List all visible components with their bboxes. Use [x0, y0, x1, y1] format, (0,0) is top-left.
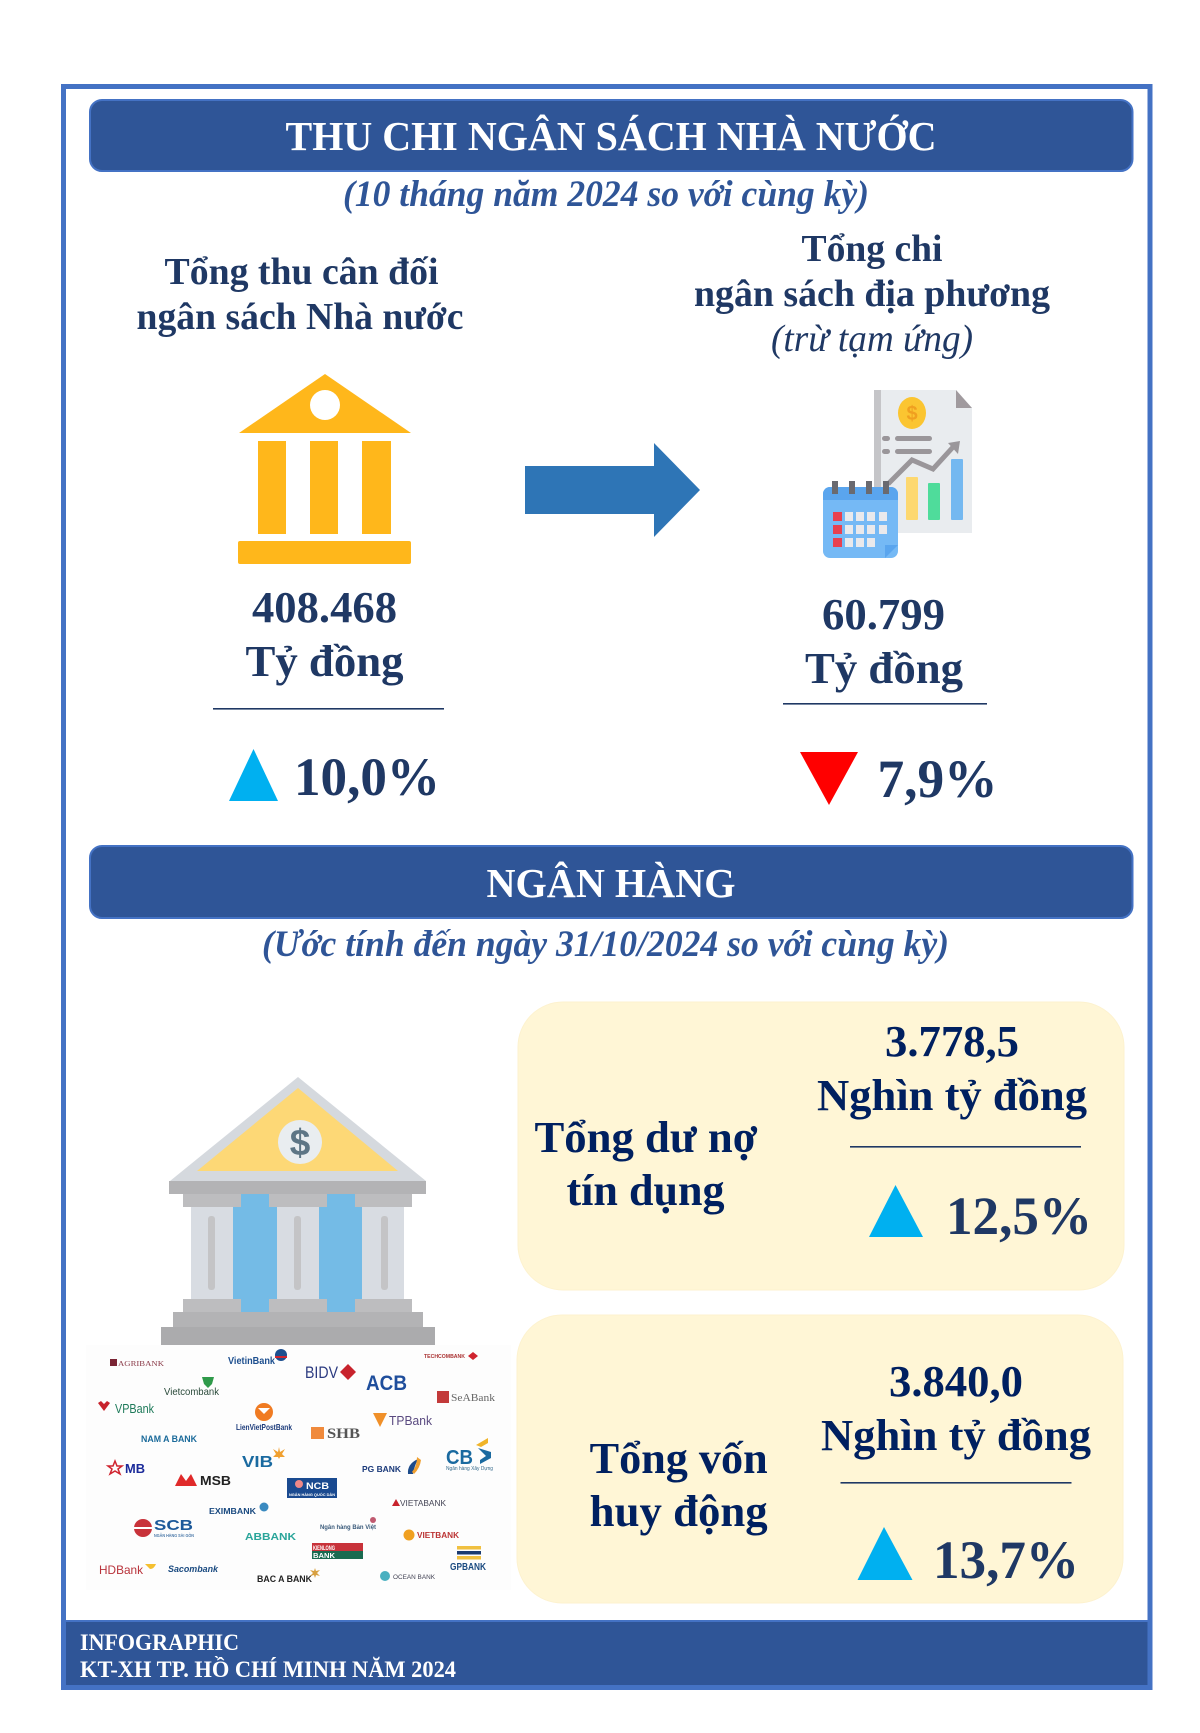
panel: deposits [517, 1315, 1123, 1603]
bank logos collage: Ngân hàng Xây Dựng [446, 1466, 493, 1472]
icon: blue bank building: $ [290, 1122, 311, 1163]
bank logos collage: Vietcombank [164, 1386, 220, 1398]
credit label: Tổng dư nợ [534, 1113, 758, 1162]
bank logos collage: OCEAN BANK [393, 1574, 436, 1581]
revenue heading: Tổng thu cân đối [164, 251, 438, 293]
footer bar [61, 1620, 1152, 1690]
bank logos collage: SeABank [451, 1393, 495, 1404]
bank logos collage: SCB [154, 1517, 193, 1534]
bank logos collage: KIENLONG [313, 1545, 335, 1552]
expenditure heading [694, 228, 1050, 360]
expenditure value: 60.799 [822, 590, 945, 639]
heading banner: banking: NGÂN HÀNG [486, 860, 736, 906]
heading banner: banking [90, 846, 1132, 918]
subtitle: banking date: (Ước tính đến ngày 31/10/2024 so với cùng kỳ) [262, 924, 949, 965]
credit label: tín dụng [566, 1166, 724, 1215]
deposits change [858, 1527, 1079, 1590]
deposits label [590, 1434, 768, 1536]
bank logos collage: NCB [306, 1481, 330, 1491]
deposits value [821, 1357, 1091, 1484]
bank logos collage: VietinBank [228, 1355, 275, 1367]
revenue value [213, 583, 444, 710]
credit value: Nghìn tỷ đồng [817, 1071, 1087, 1120]
deposits label: huy động [590, 1487, 768, 1536]
revenue heading [136, 251, 464, 338]
expenditure change [800, 749, 998, 809]
panel: credit [518, 1002, 1124, 1290]
bank logos collage: NAM A BANK [141, 1434, 197, 1444]
revenue value: Tỷ đồng [246, 637, 404, 686]
credit value [817, 1017, 1087, 1148]
bank logos collage: VIETABANK [400, 1499, 447, 1508]
bank logos collage: ABBANK [245, 1532, 297, 1543]
revenue change [229, 747, 440, 807]
bank logos collage: Ngân hàng Bản Việt [320, 1525, 376, 1531]
bank logos collage: NGÂN HÀNG SÀI GÒN [154, 1531, 194, 1538]
arrow: revenue to expenditure [525, 443, 700, 537]
bank logos collage: VPBank [115, 1402, 155, 1416]
expenditure change: 7,9% [878, 749, 998, 809]
subtitle: budget period: (10 tháng năm 2024 so với cùng kỳ) [343, 174, 869, 215]
bank logos collage: GPBANK [450, 1562, 487, 1573]
bank logos collage: AGRIBANK [118, 1359, 165, 1368]
bank logos collage: NGÂN HÀNG QUỐC DÂN [289, 1492, 335, 1497]
credit label [534, 1113, 758, 1215]
deposits label: Tổng vốn [590, 1434, 768, 1483]
heading banner: budget: THU CHI NGÂN SÁCH NHÀ NƯỚC [286, 113, 936, 159]
expenditure heading: (trừ tạm ứng) [771, 318, 973, 360]
deposits value: 3.840,0 [889, 1357, 1023, 1406]
footer bar: INFOGRAPHIC [80, 1630, 239, 1655]
credit change: 12,5% [946, 1186, 1092, 1246]
bank logos collage: LienVietPostBank [236, 1422, 292, 1432]
footer bar: KT-XH TP. HỒ CHÍ MINH NĂM 2024 [80, 1656, 456, 1682]
credit change [869, 1185, 1092, 1246]
bank logos collage: BANK [313, 1551, 336, 1560]
bank logos collage: PG BANK [362, 1464, 402, 1474]
bank logos collage: VIETBANK [417, 1531, 459, 1540]
bank logos collage: Sacombank [168, 1564, 219, 1574]
bank logos collage: SHB [327, 1426, 360, 1442]
icon: financial report with calendar: $ [906, 403, 918, 425]
expenditure value: Tỷ đồng [805, 644, 963, 693]
revenue change: 10,0% [294, 747, 440, 807]
bank logos collage: MB [125, 1462, 145, 1476]
icon: blue bank building [161, 1077, 435, 1345]
bank logos collage: MSB [200, 1473, 231, 1488]
bank logos collage: VIB [242, 1454, 273, 1471]
bank logos collage [86, 1345, 511, 1590]
revenue value: 408.468 [252, 583, 397, 632]
section: banking [86, 846, 1132, 1603]
deposits value: Nghìn tỷ đồng [821, 1411, 1091, 1460]
heading banner: budget [90, 100, 1132, 171]
expenditure heading: ngân sách địa phương [694, 273, 1050, 315]
bank logos collage: BIDV [305, 1363, 339, 1382]
icon: financial report with calendar [823, 390, 972, 558]
revenue heading: ngân sách Nhà nước [136, 296, 464, 338]
bank logos collage: TECHCOMBANK [424, 1354, 465, 1360]
expenditure value [783, 590, 987, 705]
bank logos collage: TPBank [389, 1413, 432, 1428]
expenditure heading: Tổng chi [802, 228, 942, 270]
deposits change: 13,7% [933, 1530, 1079, 1590]
bank logos collage: CB [446, 1447, 473, 1469]
bank logos collage: ACB [366, 1372, 407, 1395]
bank logos collage: HDBank [99, 1563, 144, 1577]
section: budget [90, 100, 1132, 809]
bank logos collage: BAC A BANK [257, 1574, 312, 1584]
bank logos collage: EXIMBANK [209, 1506, 257, 1516]
credit value: 3.778,5 [885, 1017, 1019, 1066]
icon: yellow state building [238, 374, 411, 564]
